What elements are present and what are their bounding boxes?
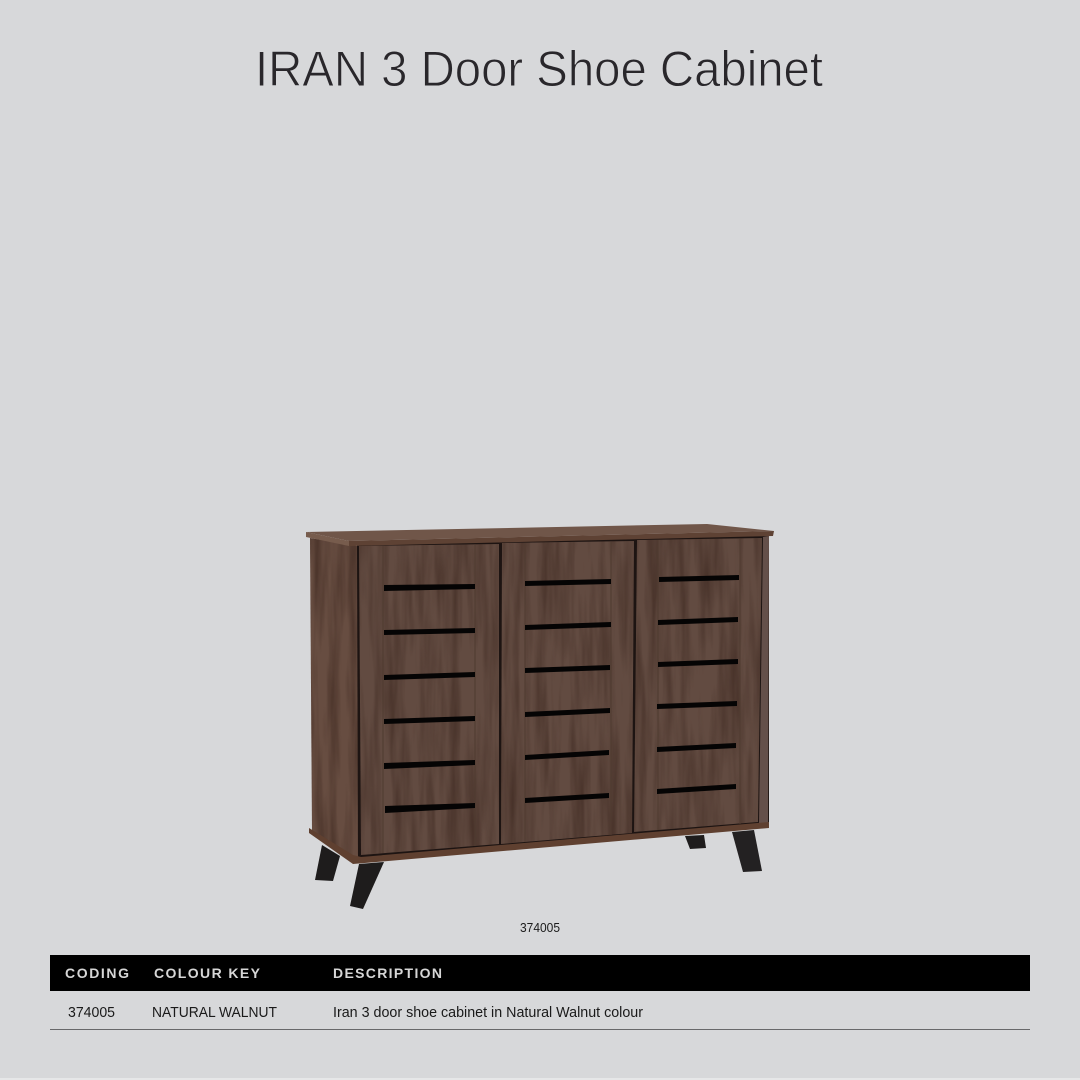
product: shoe cabinet <box>306 524 774 909</box>
leg: back left <box>315 845 340 881</box>
table header: COLOUR KEY <box>154 965 261 981</box>
door: centre <box>501 541 634 844</box>
cabinet side panel <box>310 538 361 860</box>
door slats <box>384 584 475 813</box>
leg: front right <box>732 830 762 872</box>
leg: back right <box>685 835 706 849</box>
door inner panel lines <box>383 545 475 853</box>
door: left <box>359 544 499 855</box>
door: right <box>634 538 762 832</box>
cabinet front backing <box>357 535 769 858</box>
table row: 374005 <box>68 1005 115 1021</box>
door slats <box>657 575 739 794</box>
door slats <box>525 579 611 803</box>
door inner panel lines <box>525 542 611 842</box>
door inner panel lines <box>658 539 740 830</box>
title: IRAN 3 Door Shoe Cabinet <box>255 41 823 97</box>
table header <box>50 955 1030 991</box>
leg: front left <box>350 862 384 909</box>
product code caption: 374005 <box>520 921 560 935</box>
table <box>50 955 1030 1030</box>
table header: DESCRIPTION <box>333 965 442 981</box>
table header: CODING <box>65 965 129 981</box>
right side strip <box>759 536 769 823</box>
table row: NATURAL WALNUT <box>152 1005 277 1021</box>
table row <box>50 1005 1030 1030</box>
cabinet top front edge <box>349 531 774 546</box>
cabinet top surface <box>306 524 774 541</box>
table row: Iran 3 door shoe cabinet in Natural Walnut colour <box>333 1005 643 1021</box>
cabinet plinth <box>309 822 769 864</box>
